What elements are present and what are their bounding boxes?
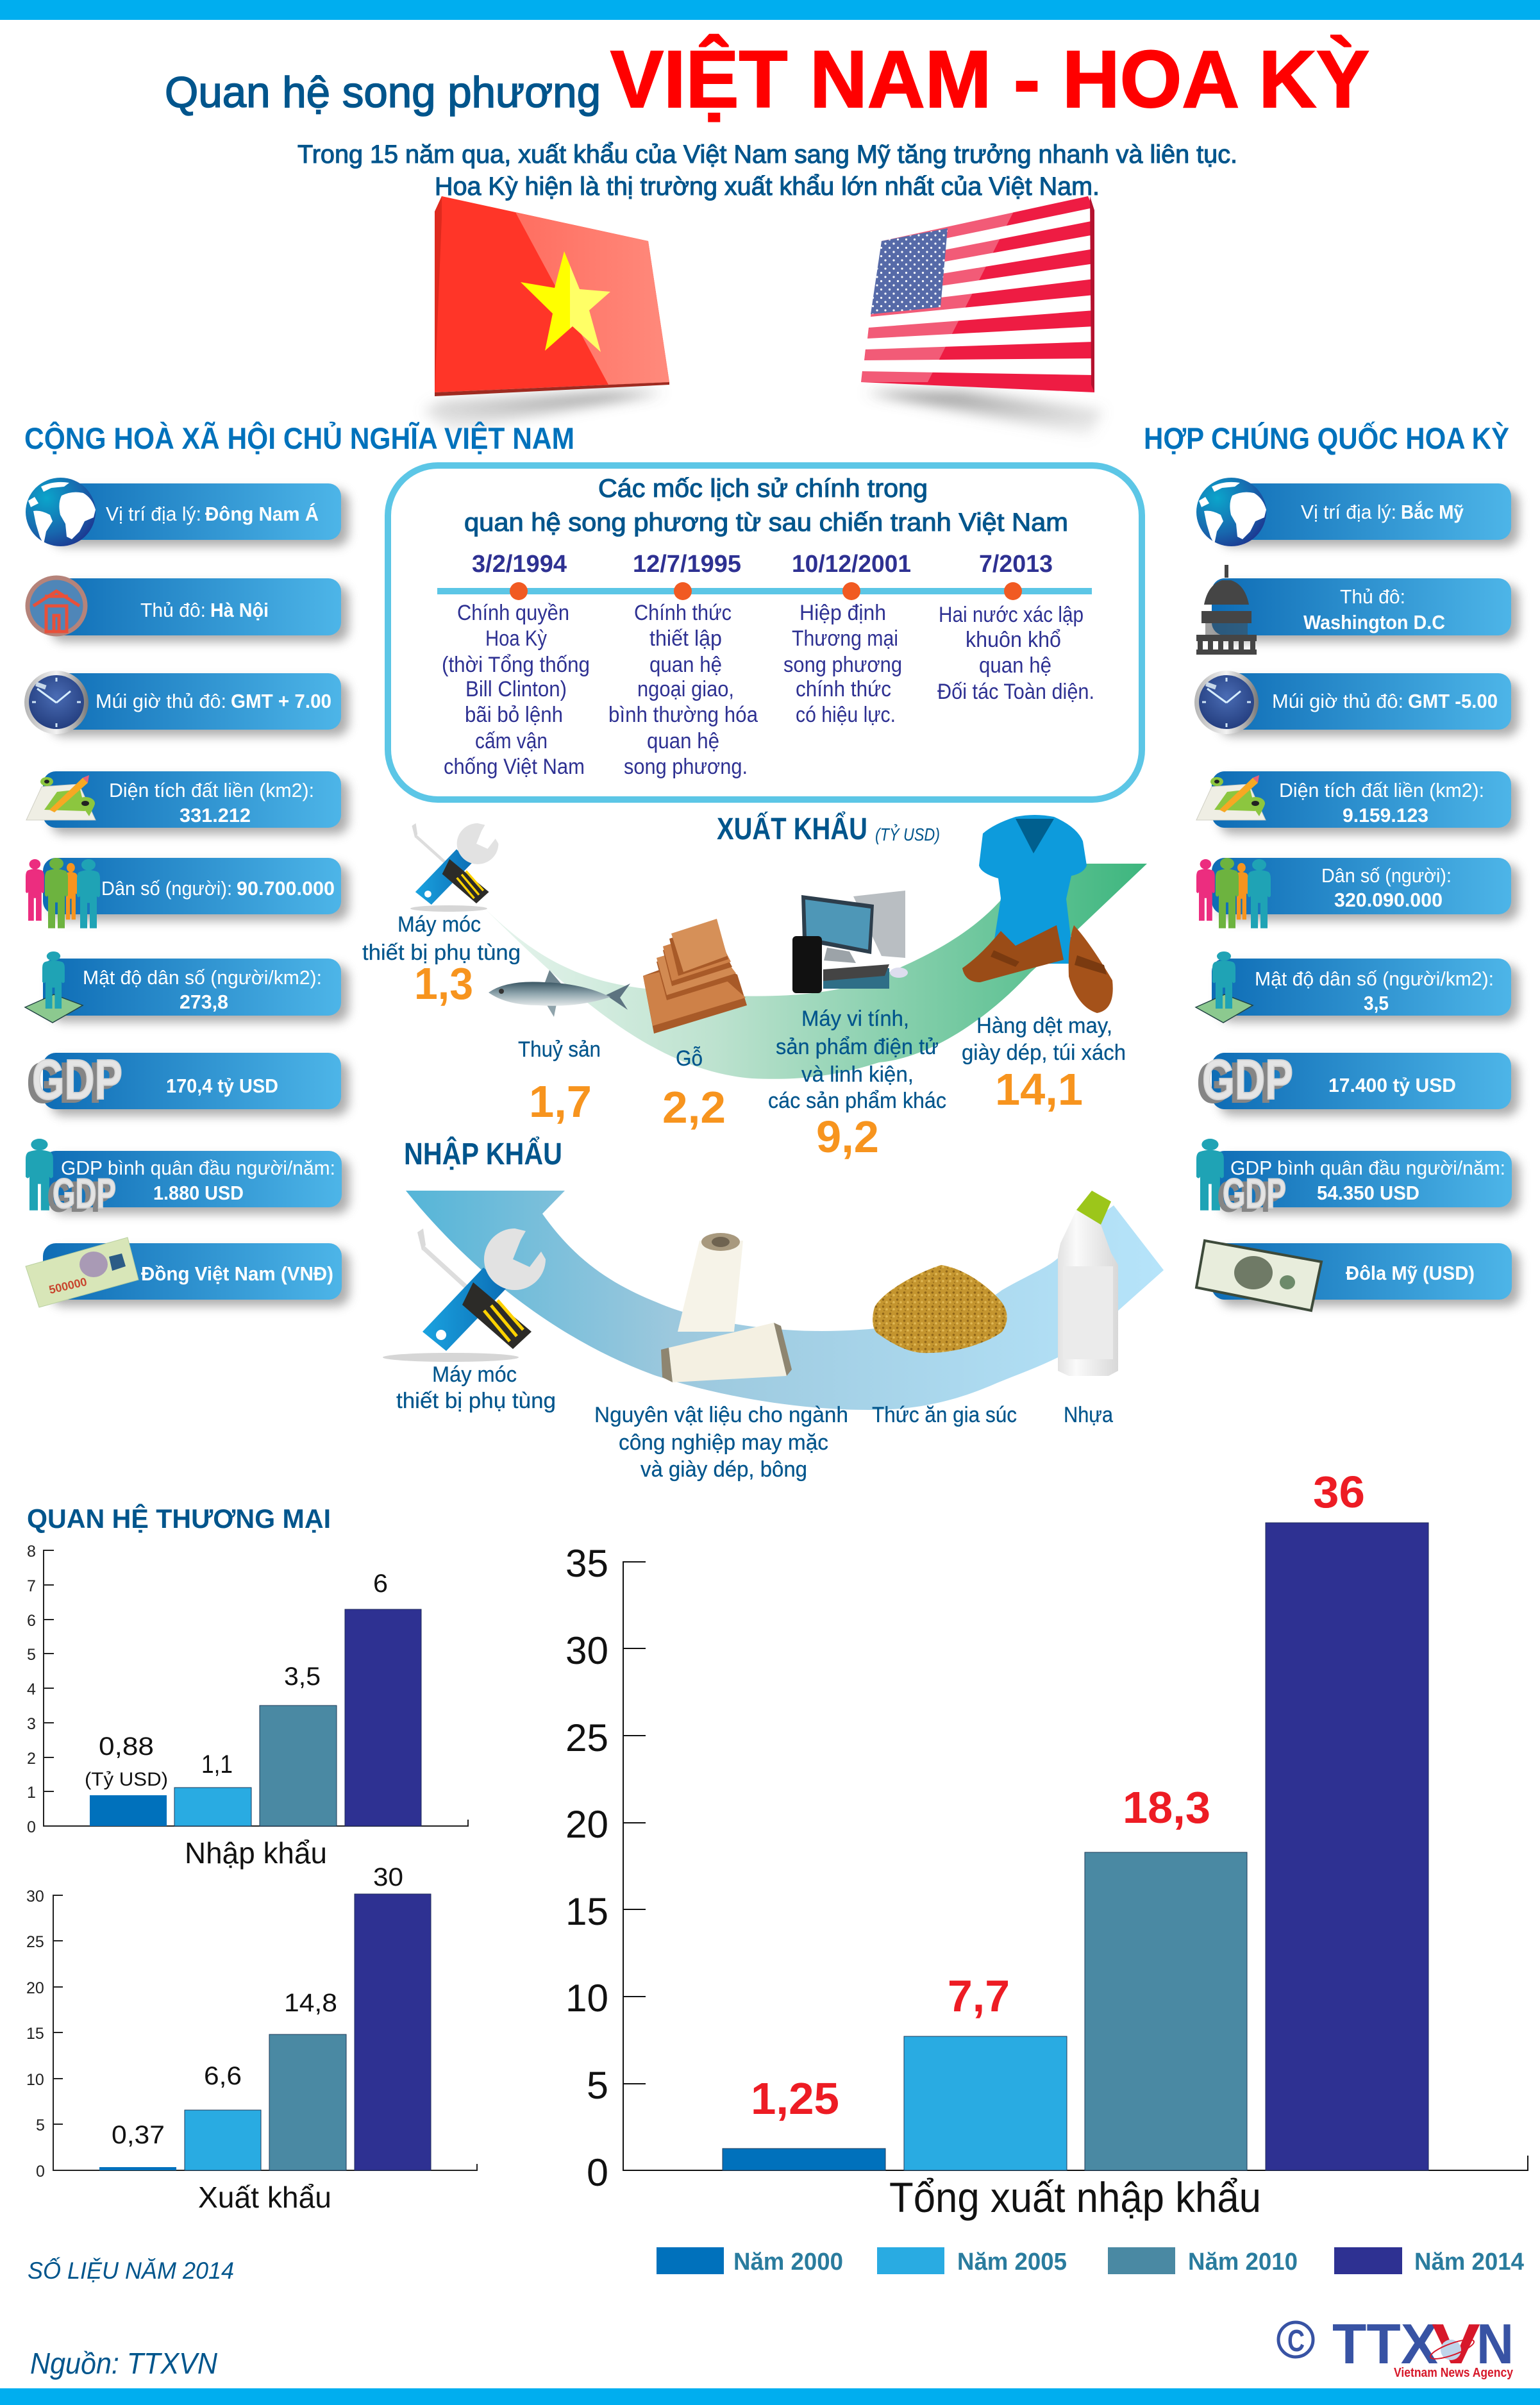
export item: seafood: 1,7 <box>529 1077 592 1127</box>
export item: wood <box>662 1046 726 1132</box>
bar chart: imports: (Tỷ USD) <box>85 1769 168 1790</box>
bar chart: exports: Xuất khẩu <box>198 2181 331 2214</box>
milestone 2001: song phương <box>783 653 902 677</box>
fact: population: Dân số (người): <box>101 877 232 900</box>
fact: GDP per capita: GDP <box>1223 1169 1286 1217</box>
fact: GDP <box>32 1048 349 1116</box>
fact: GDP: 170,4 tỷ USD <box>166 1075 278 1097</box>
fact: capital: Hà Nội <box>210 599 269 621</box>
fact: location <box>1196 478 1519 546</box>
fact: density: Mật độ dân số (người/km2): <box>83 966 322 989</box>
fact: capital <box>1196 565 1519 655</box>
bar chart: exports: 0,37 <box>112 2121 165 2149</box>
fact: currency: Đôla Mỹ (USD) <box>1346 1262 1475 1284</box>
export item: machinery: Máy móc <box>398 912 481 937</box>
arrow: imports <box>406 1191 1164 1410</box>
milestone 1994: bãi bỏ lệnh <box>465 703 563 727</box>
bar chart: exports: 6,6 <box>204 2062 242 2090</box>
fact: land area <box>1196 771 1519 834</box>
export item: wood: 2,2 <box>662 1082 726 1132</box>
export item: machinery <box>362 912 521 1009</box>
export item: textiles: Hàng dệt may, <box>976 1014 1112 1038</box>
bar chart: total trade: 20 <box>565 1803 608 1846</box>
bar chart: imports: 1,1 <box>201 1750 233 1779</box>
fact: location <box>26 478 349 546</box>
bar chart: imports: 0,88 <box>99 1732 154 1761</box>
flag: United States <box>861 196 1103 436</box>
bar chart: imports: 1 <box>27 1784 36 1802</box>
heading: exports: (TỶ USD) <box>875 824 940 844</box>
import item: textile materials <box>594 1403 848 1482</box>
milestone 2013: khuôn khổ <box>966 628 1061 652</box>
bar chart: total trade: 5 <box>587 2064 608 2107</box>
heading: trade relations: QUAN HỆ THƯƠNG MẠI <box>27 1503 331 1534</box>
fact: GDP: 17.400 tỷ USD <box>1328 1074 1456 1096</box>
milestone 1994: 3/2/1994 <box>472 551 567 578</box>
export item: electronics: 9,2 <box>816 1112 879 1162</box>
bar chart: total trade: 15 <box>565 1890 608 1933</box>
title: Quan hệ song phương <box>165 68 601 117</box>
bar chart: exports <box>26 1863 477 2214</box>
bar chart: total trade <box>565 1467 1528 2221</box>
export item: electronics <box>768 1007 946 1162</box>
panel: historic milestones <box>388 465 1142 800</box>
import item: textile materials: và giày dép, bông <box>640 1457 807 1482</box>
fact: time zone: Múi giờ thủ đô: <box>96 690 226 712</box>
bar chart: imports: 3 <box>27 1715 36 1733</box>
export item: machinery: thiết bị phụ tùng <box>362 941 521 965</box>
fact: time zone: GMT -5.00 <box>1408 690 1498 712</box>
bar chart: imports: 6 <box>373 1570 388 1598</box>
export item: wood: Gỗ <box>676 1046 703 1071</box>
milestone 1994: Bill Clinton) <box>465 677 567 701</box>
bar chart: total trade: 25 <box>565 1716 608 1759</box>
milestone 2001: chính thức <box>796 677 891 701</box>
subtitle <box>297 140 1237 201</box>
fact: population <box>1196 858 1519 928</box>
import item: textile materials: công nghiệp may mặc <box>619 1430 828 1455</box>
milestone 2013: Hai nước xác lập <box>939 603 1084 627</box>
icon: wood planks <box>643 919 747 1034</box>
bar chart: exports: 5 <box>36 2116 45 2134</box>
bar chart: imports: Nhập khẩu <box>185 1836 327 1870</box>
fact: currency <box>26 1237 349 1307</box>
legend: Năm 2010 <box>1188 2249 1298 2275</box>
bar chart: exports: 30 <box>26 1888 44 1906</box>
milestone 1994: cấm vận <box>475 729 548 753</box>
fact: currency: 500000 <box>47 1275 88 1296</box>
milestone 2001: Hiệp định <box>799 601 886 625</box>
bar chart: imports: 3,5 <box>284 1663 321 1691</box>
logo: TTXVN: C <box>1287 2324 1305 2358</box>
bar chart: imports: 8 <box>27 1543 36 1561</box>
bar chart: total trade: 7,7 <box>948 1971 1010 2021</box>
panel heading: quan hệ song phương từ sau chiến tranh Việt Nam <box>464 508 1068 537</box>
bar chart: exports: 15 <box>26 2025 44 2043</box>
bar chart: exports: 30 <box>373 1863 403 1891</box>
milestone 1994: Chính quyền <box>457 601 569 625</box>
top bar <box>0 0 1540 20</box>
milestone 2001: có hiệu lực. <box>796 703 896 727</box>
bar chart: total trade: 35 <box>565 1542 608 1585</box>
legend <box>657 2247 1524 2275</box>
legend: Năm 2014 <box>1414 2249 1524 2275</box>
bar chart: imports: 0 <box>27 1818 36 1836</box>
fact: GDP per capita: 1.880 USD <box>153 1182 244 1204</box>
fact: GDP per capita <box>1196 1139 1519 1217</box>
bar chart: imports <box>27 1543 468 1870</box>
source: Nguồn: TTXVN <box>30 2347 218 2380</box>
fact: location: Bắc Mỹ <box>1401 500 1464 523</box>
legend: Năm 2000 <box>733 2249 843 2275</box>
milestone 1995: ngoại giao, <box>637 677 734 701</box>
panel: Vietnam facts <box>24 478 349 1307</box>
fact: capital: Thủ đô: <box>140 599 206 621</box>
bar chart: total trade: Tổng xuất nhập khẩu <box>889 2174 1261 2221</box>
fact: currency: Đồng Việt Nam (VNĐ) <box>141 1262 333 1285</box>
import item: feed: Thức ăn gia súc <box>872 1403 1017 1427</box>
icon: shoes <box>962 925 1113 1013</box>
timeline <box>437 582 1092 600</box>
fact: population: 320.090.000 <box>1334 889 1443 911</box>
panel: United States facts <box>1194 478 1519 1311</box>
fact: land area: Diện tích đất liền (km2): <box>1279 779 1484 801</box>
export item: textiles: 14,1 <box>995 1064 1083 1114</box>
milestone 1995: quan hệ <box>647 729 719 753</box>
fact: land area: Diện tích đất liền (km2): <box>109 779 314 801</box>
import item: machinery: thiết bị phụ tùng <box>396 1389 556 1413</box>
title <box>165 34 1369 124</box>
bar chart: total trade: 1,25 <box>751 2074 839 2124</box>
milestone 2001 <box>783 551 911 727</box>
logo: TTXVN: V <box>1432 2312 1480 2376</box>
milestone 1995: Chính thức <box>634 601 732 625</box>
milestone 1995: song phương. <box>624 755 748 779</box>
milestone 1995: thiết lập <box>649 626 722 651</box>
bar chart: total trade: 30 <box>565 1629 608 1672</box>
fact: GDP per capita: GDP bình quân đầu người/năm: <box>61 1157 335 1179</box>
export item: electronics: và linh kiện, <box>801 1062 914 1087</box>
icon: animal feed <box>873 1265 1007 1353</box>
bar chart: imports: 7 <box>27 1577 36 1595</box>
bar chart: imports: 2 <box>27 1750 36 1768</box>
fact: capital: Washington D.C <box>1303 611 1445 633</box>
import item: machinery <box>396 1362 556 1413</box>
heading: imports: NHẬP KHẨU <box>404 1136 562 1171</box>
fact: time zone <box>1194 671 1519 736</box>
fact: GDP <box>1202 1048 1519 1116</box>
milestone 1995: quan hệ <box>649 653 722 677</box>
note: data year: SỐ LIỆU NĂM 2014 <box>28 2257 234 2284</box>
export item: electronics: Máy vi tính, <box>801 1007 909 1031</box>
import item: plastic: Nhựa <box>1064 1403 1113 1427</box>
icon: plastic bottle <box>1058 1191 1118 1376</box>
subtitle: Trong 15 năm qua, xuất khẩu của Việt Nam sang Mỹ tăng trưởng nhanh và liên tục. <box>297 140 1237 169</box>
milestone 1995: bình thường hóa <box>608 703 758 727</box>
milestone 2001: 10/12/2001 <box>792 551 911 578</box>
bar chart: imports: 4 <box>27 1680 36 1698</box>
milestone 1995 <box>608 551 758 779</box>
fact: population: Dân số (người): <box>1321 864 1452 887</box>
import item: textile materials: Nguyên vật liệu cho ngành <box>594 1403 848 1427</box>
panel heading <box>464 474 1068 537</box>
bar chart: exports: 25 <box>26 1933 44 1951</box>
fact: time zone <box>24 671 349 736</box>
milestone 1994 <box>442 551 590 779</box>
fact: currency <box>1196 1241 1519 1311</box>
fact: capital: Thủ đô: <box>1340 585 1405 608</box>
fact: GDP: GDP <box>1202 1048 1293 1111</box>
arrow: exports <box>481 864 1147 1079</box>
bar chart: exports: 10 <box>26 2071 44 2089</box>
fact: GDP per capita <box>26 1139 349 1217</box>
logo: TTXVN <box>1278 2312 1514 2380</box>
milestone 1994: (thời Tổng thống <box>442 653 590 677</box>
fact: time zone: Múi giờ thủ đô: <box>1272 690 1403 712</box>
fact: density: 3,5 <box>1364 992 1389 1014</box>
fact: population: 90.700.000 <box>237 877 335 900</box>
fact: GDP: GDP <box>32 1048 122 1111</box>
logo: TTXVN: N <box>1477 2312 1514 2376</box>
fact: density: 273,8 <box>180 991 228 1013</box>
bar chart: total trade: 18,3 <box>1123 1782 1210 1832</box>
icon: import machinery tools <box>383 1228 546 1362</box>
fact: density <box>25 951 349 1023</box>
fact: density: Mật độ dân số (người/km2): <box>1255 968 1494 990</box>
logo: TTXVN: Vietnam News Agency <box>1394 2366 1514 2380</box>
fact: land area: 9.159.123 <box>1343 804 1428 826</box>
milestone 1995: 12/7/1995 <box>633 551 741 578</box>
bottom bar <box>0 2388 1540 2405</box>
icon: fish <box>489 970 630 1017</box>
fact: density <box>1196 951 1519 1023</box>
fact: location: Đông Nam Á <box>205 503 319 525</box>
milestone 2013: quan hệ <box>979 653 1051 678</box>
export item: textiles <box>962 1014 1126 1114</box>
milestone 2013 <box>937 551 1094 704</box>
heading: exports: XUẤT KHẨU <box>717 812 867 846</box>
bar chart: imports: 6 <box>27 1612 36 1630</box>
fact: population <box>26 858 349 928</box>
fact: GDP per capita: 54.350 USD <box>1317 1182 1419 1204</box>
fact: land area <box>26 771 349 834</box>
fact: location: Vị trí địa lý: <box>106 503 201 525</box>
icon: export machinery tools <box>410 823 498 912</box>
bar chart: total trade: 0 <box>587 2151 608 2194</box>
milestone 2013: 7/2013 <box>979 551 1053 578</box>
export item: seafood <box>518 1037 601 1127</box>
fact: land area: 331.212 <box>180 804 251 826</box>
fact: location: Vị trí địa lý: <box>1301 501 1396 523</box>
icon: shirt <box>979 815 1087 964</box>
bar chart: total trade: 10 <box>565 1977 608 2020</box>
icon: computer <box>792 891 908 993</box>
milestone 2013: Đối tác Toàn diện. <box>937 680 1094 704</box>
milestone 1994: Hoa Kỳ <box>485 626 547 651</box>
fact: capital <box>28 578 349 642</box>
legend: Năm 2005 <box>957 2249 1067 2275</box>
bar chart: imports: 5 <box>27 1646 36 1664</box>
export item: machinery: 1,3 <box>414 959 473 1009</box>
milestone 1994: chống Việt Nam <box>444 755 585 779</box>
milestone 2001: Thương mại <box>792 626 898 651</box>
flag: Vietnam <box>423 196 669 431</box>
fact: GDP per capita: GDP <box>53 1169 116 1217</box>
import item: machinery: Máy móc <box>432 1362 517 1387</box>
bar chart: exports: 14,8 <box>284 1989 337 2017</box>
panel heading: Các mốc lịch sử chính trong <box>598 474 928 503</box>
logo: TTXVN: TTX <box>1332 2312 1438 2376</box>
export item: textiles: giày dép, túi xách <box>962 1041 1126 1065</box>
bar chart: exports: 20 <box>26 1979 44 1997</box>
title: VIỆT NAM - HOA KỲ <box>610 34 1369 124</box>
bar chart: exports: 0 <box>36 2163 45 2181</box>
export item: seafood: Thuỷ sản <box>518 1037 601 1062</box>
heading: Vietnam: CỘNG HOÀ XÃ HỘI CHỦ NGHĨA VIỆT NAM <box>24 421 574 455</box>
subtitle: Hoa Kỳ hiện là thị trường xuất khẩu lớn nhất của Việt Nam. <box>435 172 1100 201</box>
fact: time zone: GMT + 7.00 <box>231 690 331 712</box>
export item: electronics: các sản phẩm khác <box>768 1089 946 1113</box>
fact: GDP per capita: GDP bình quân đầu người/năm: <box>1230 1157 1505 1179</box>
icon: yarn spools <box>661 1233 792 1382</box>
export item: electronics: sản phẩm điện tử <box>776 1035 939 1059</box>
bar chart: total trade: 36 <box>1313 1467 1365 1517</box>
